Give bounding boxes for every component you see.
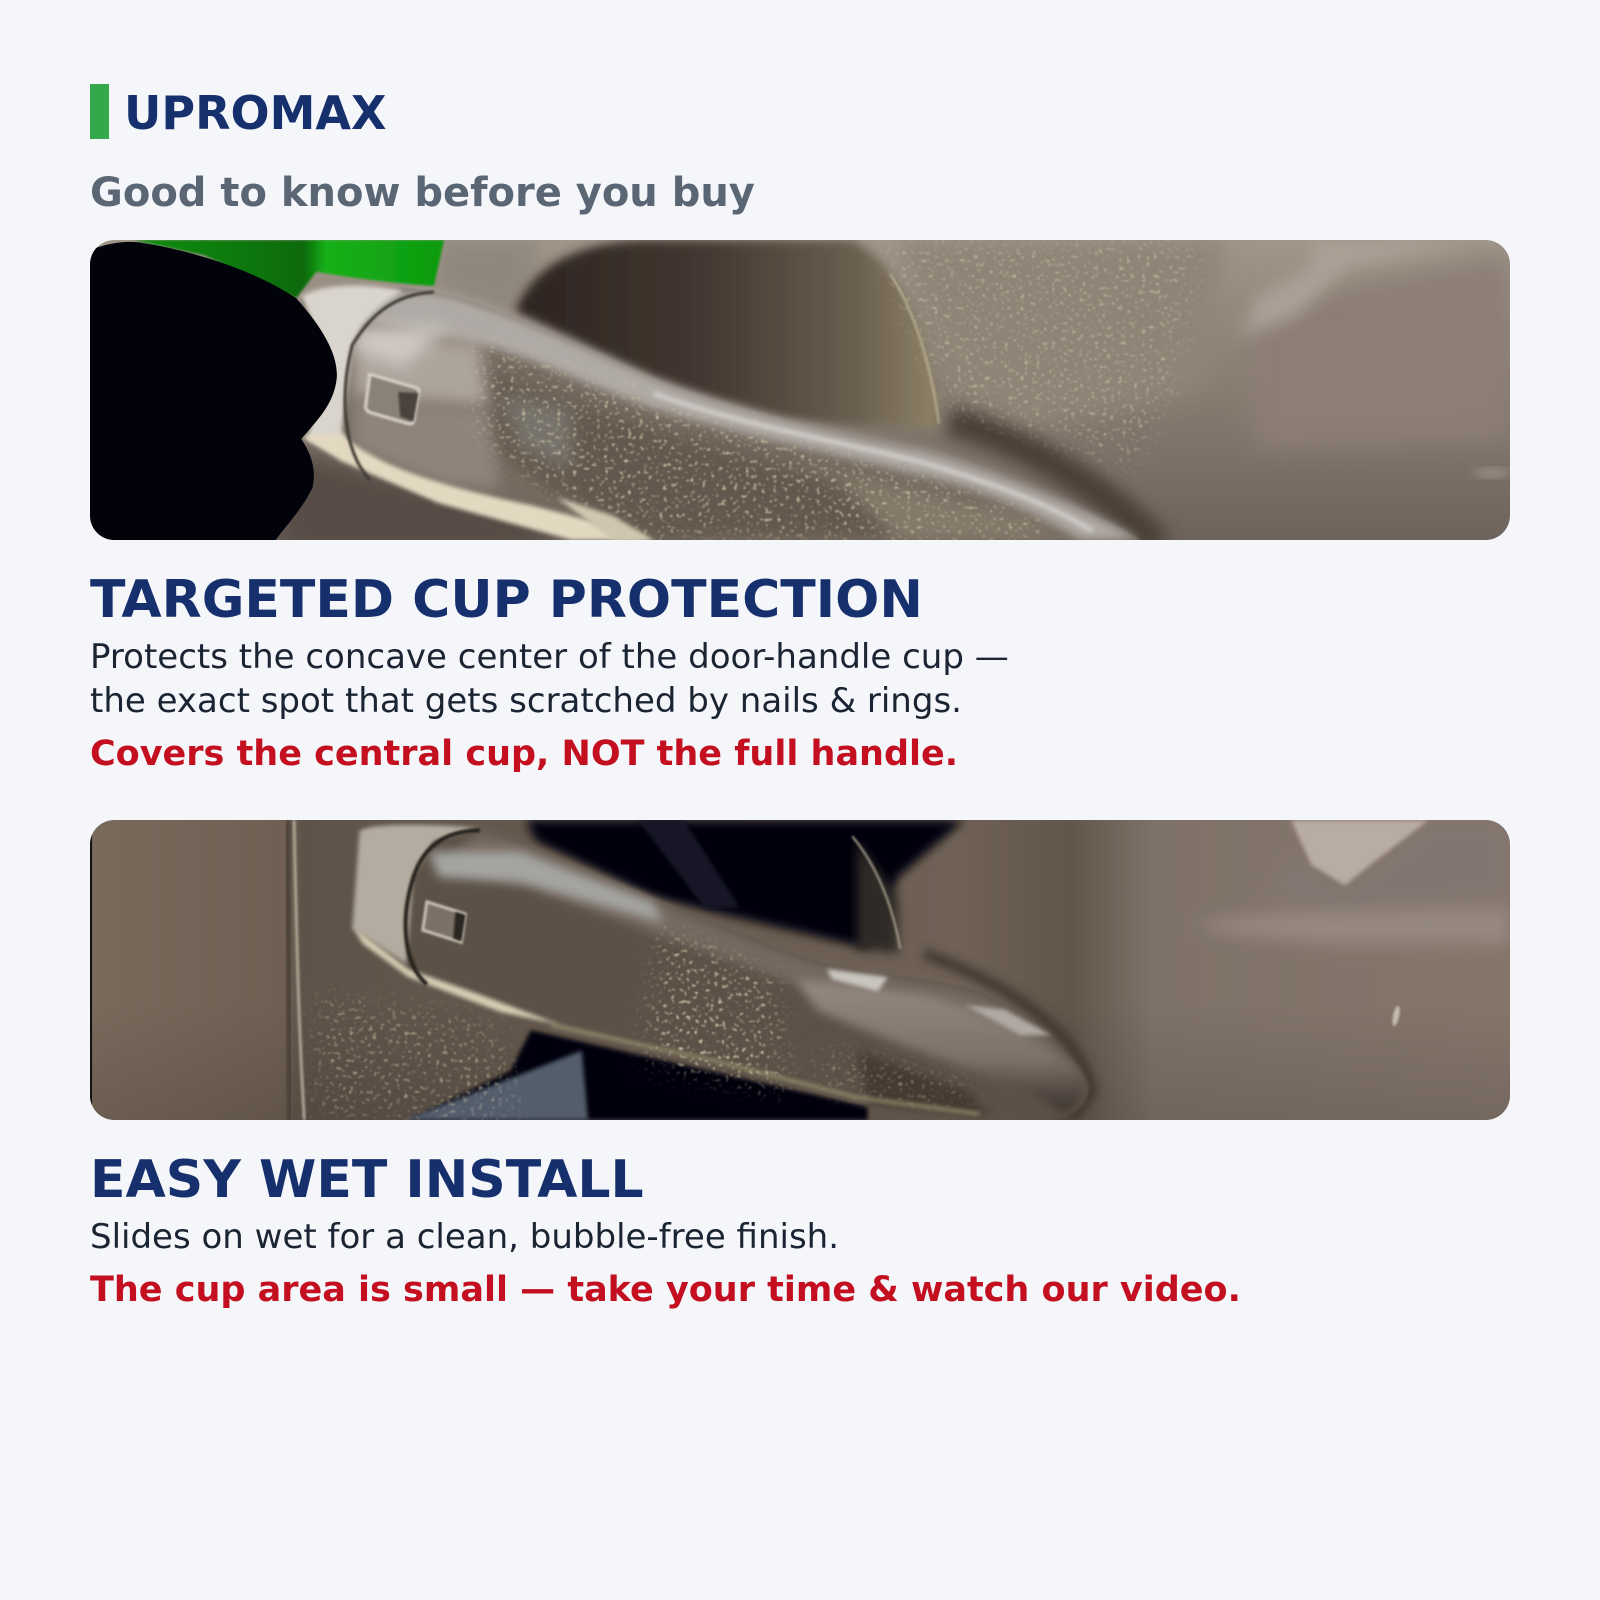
spray bottle [133,240,444,298]
description: targeted cup protection: the exact spot that gets scratched by nails & rings. [90,681,962,721]
keyhole cover [366,374,419,424]
brand name: UPROMAX [124,86,386,140]
seam line [406,830,480,984]
arm below handle [408,1030,868,1120]
dark cup with glove [526,820,964,949]
chrome end cap [301,285,403,459]
description: targeted cup protection [90,637,1009,721]
warning: covers central cup: Covers the central cup, NOT the full handle. [90,734,958,774]
brand accent bar [90,84,109,139]
heading: targeted cup protection: TARGETED CUP PROTECTION [90,570,923,630]
chrome end cap [352,825,480,964]
warning: take your time: The cup area is small — take your time & watch our video. [90,1270,1241,1310]
description: targeted cup protection: Protects the concave center of the door-handle cup — [90,637,1009,677]
light reflection [1242,244,1414,336]
panel gap line [287,820,290,1120]
description: easy wet install: Slides on wet for a clean, bubble-free finish. [90,1217,839,1257]
speckled droplets [469,240,1204,540]
heading: easy wet install: EASY WET INSTALL [90,1150,644,1210]
handle body [301,287,1141,540]
cup recess [516,240,939,429]
shadow under handle end [949,421,1158,546]
keyhole cover [423,902,466,942]
shadow behind handle tip [924,954,1092,1120]
right-side reflections [1194,820,1510,943]
seam line [345,292,434,480]
subtitle: Good to know before you buy [90,170,755,216]
gloved hand [90,242,337,540]
photo: wet door handle with spray bottle [90,240,1510,540]
droplets [306,926,972,1120]
handle [510,879,1088,1112]
photo: handle after wet install [90,820,1510,1120]
